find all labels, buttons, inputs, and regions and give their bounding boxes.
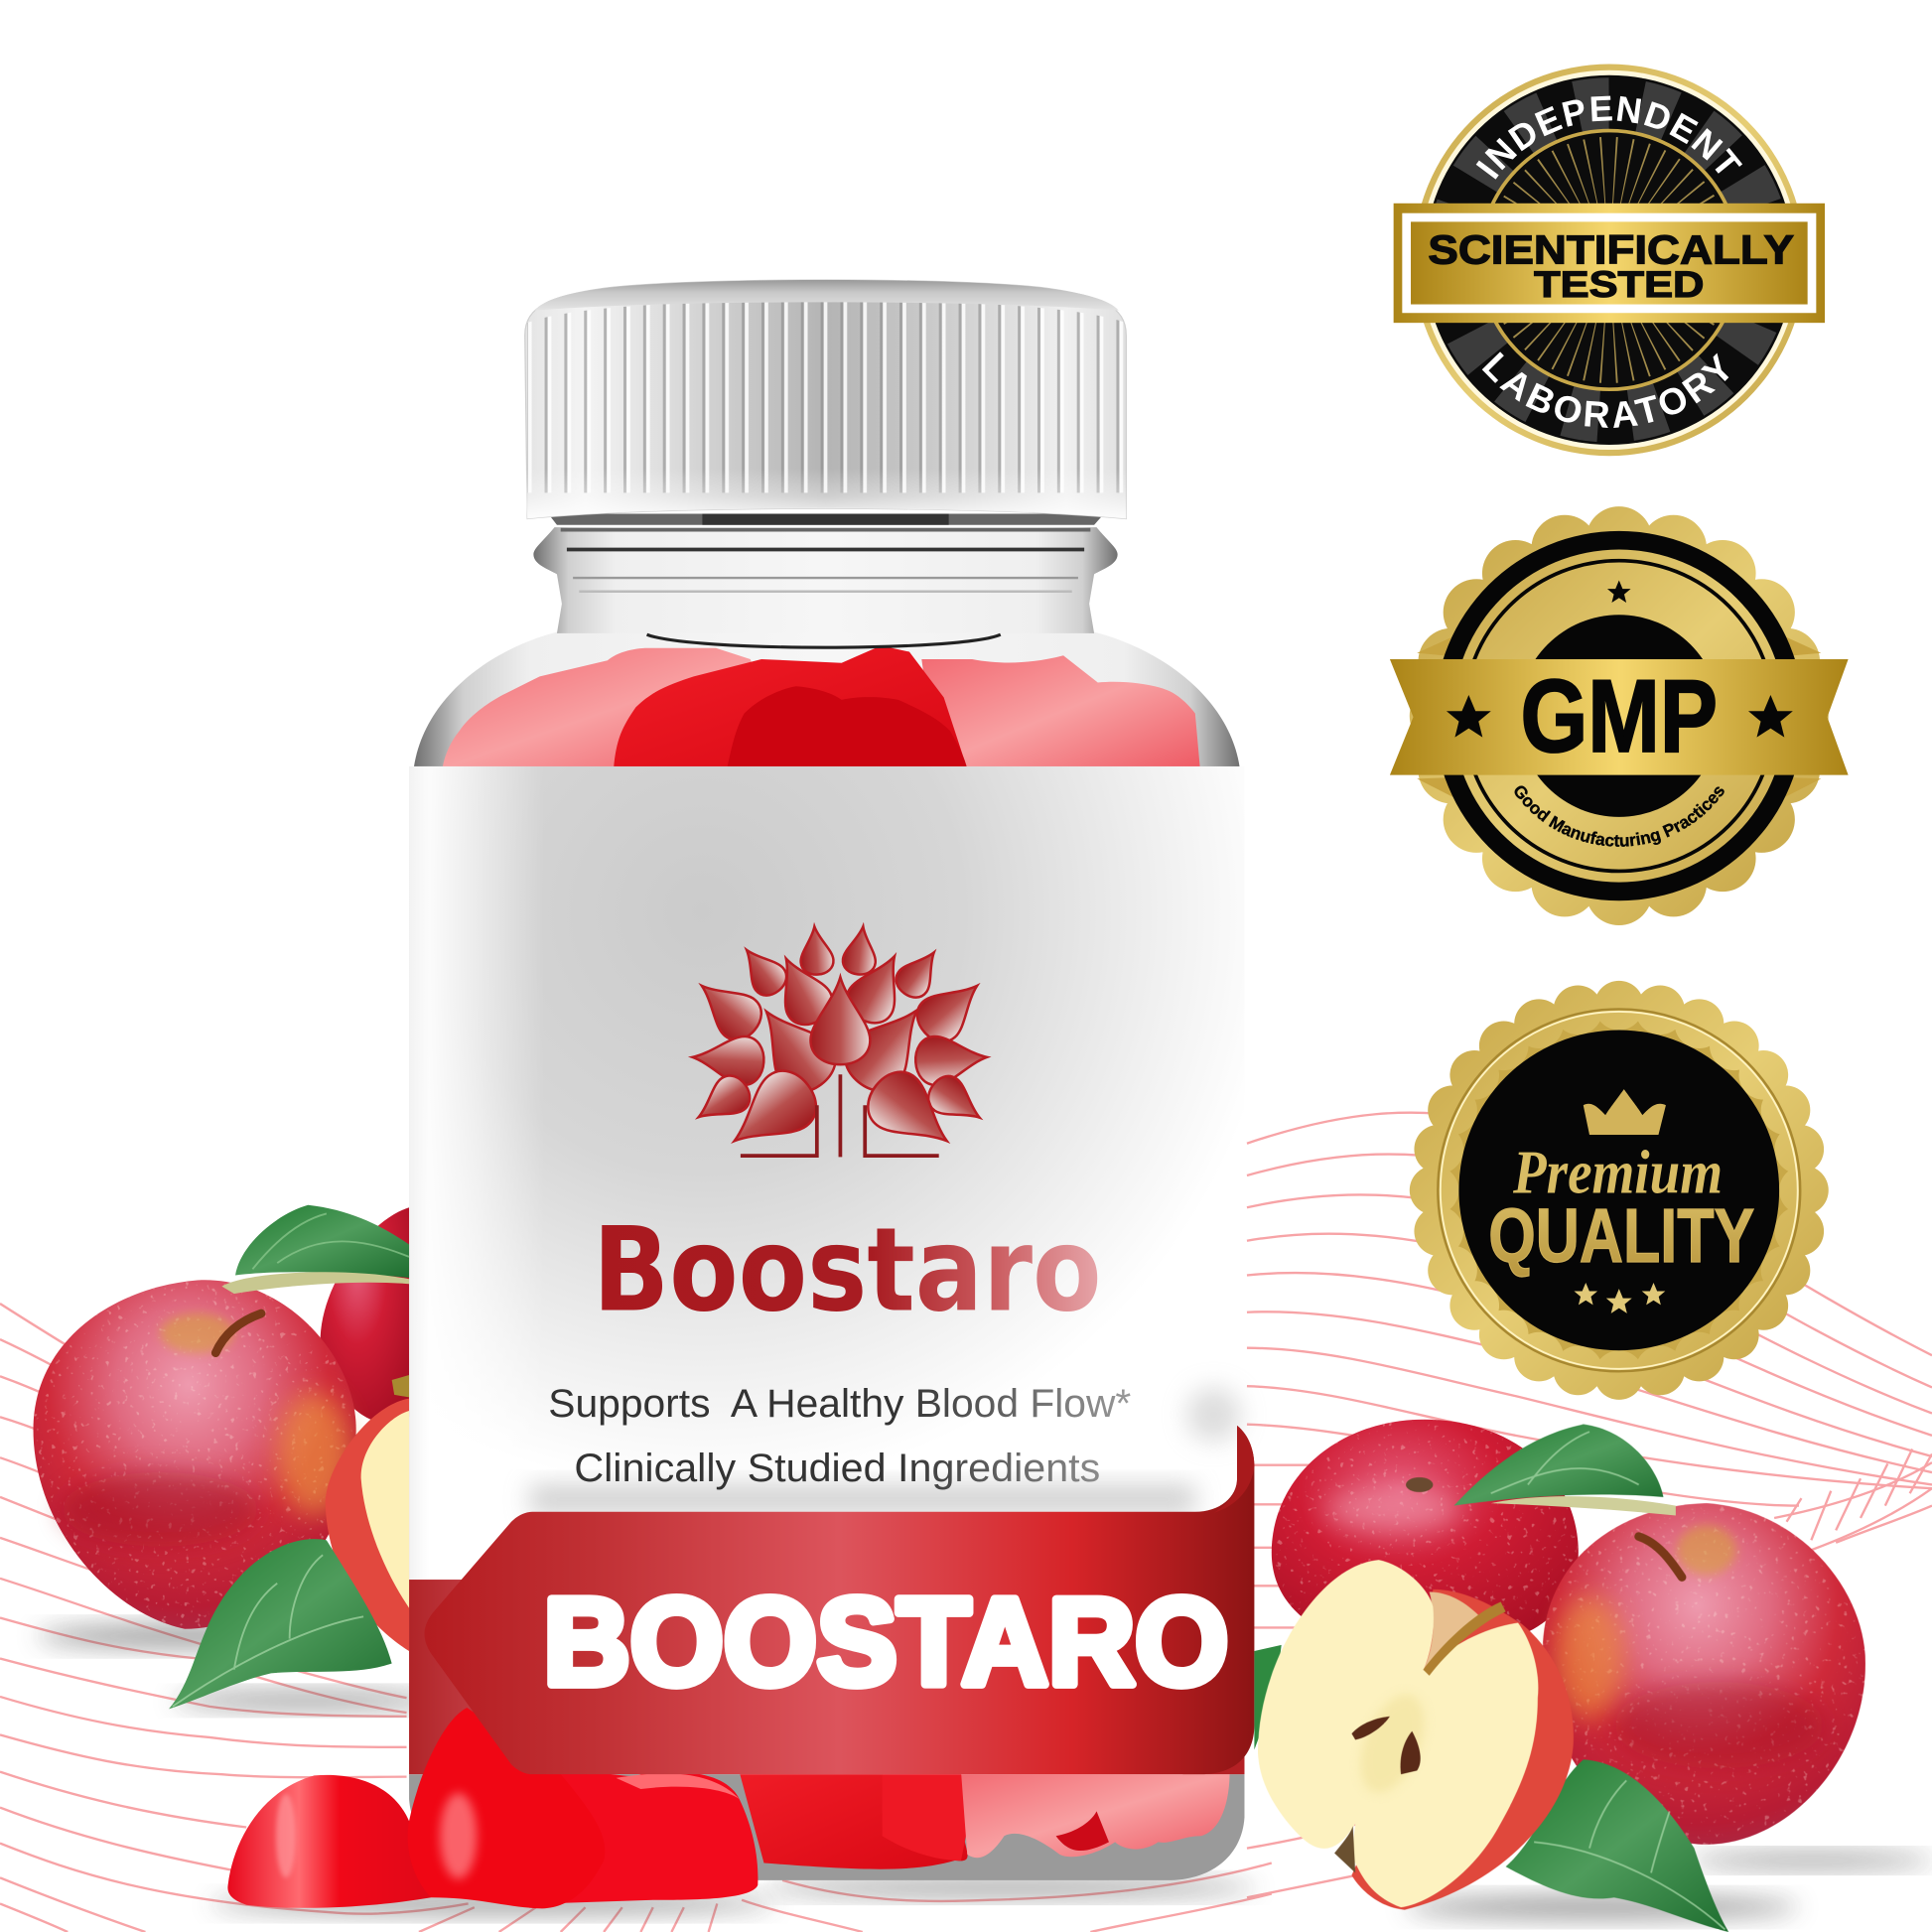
label <box>409 766 1244 1774</box>
apple flesh <box>1258 1560 1538 1907</box>
product bottle <box>409 280 1244 1880</box>
badge: scientifically tested: LABORATORY <box>1481 351 1729 428</box>
right group: back apple <box>1272 1420 1579 1651</box>
shadows under objects <box>37 1625 1932 1918</box>
label shadow above ribbon <box>530 1484 1195 1514</box>
ribbon text: BOOSTARO <box>543 1575 1228 1712</box>
tagline 1: Supports A Healthy Blood Flow* <box>548 1382 1131 1426</box>
apple seed left <box>1351 1717 1390 1739</box>
left group: main apple <box>34 1280 356 1629</box>
loose gummy right <box>542 1771 758 1903</box>
gummies inside bottle base <box>740 1772 1230 1869</box>
apple skin <box>1351 1589 1574 1910</box>
gmp ribbon <box>1390 659 1849 775</box>
right group: cut apple <box>1258 1560 1574 1910</box>
brand name: Boostaro <box>593 1202 1102 1337</box>
right group: main apple <box>1543 1503 1865 1845</box>
badge band: TESTED <box>1534 263 1704 305</box>
bottle base glass <box>409 1762 1244 1880</box>
badge band: SCIENTIFICALLY <box>1428 227 1794 273</box>
right group: bottom leaf <box>1506 1759 1728 1932</box>
neck ridges <box>548 514 1104 647</box>
badge: scientifically tested <box>1394 64 1825 457</box>
left group: cut apple <box>326 1375 409 1651</box>
arc text top <box>1470 121 1748 260</box>
gummies inside bottle top <box>443 645 1200 768</box>
gmp arc text <box>1489 717 1748 847</box>
badge band <box>1394 204 1825 323</box>
badge: GMP <box>1390 506 1849 925</box>
premium script: Premium <box>1512 1139 1723 1206</box>
logo: tree of leaves <box>687 924 993 1167</box>
left group: back apple <box>321 1207 409 1423</box>
apple seed right <box>1401 1731 1421 1774</box>
gmp ribbon stars <box>1447 695 1793 738</box>
badge: premium quality <box>1435 1006 1804 1375</box>
tagline 2: Clinically Studied Ingredients <box>574 1447 1100 1490</box>
three stars <box>1574 1283 1665 1313</box>
right group: top leaf <box>1453 1425 1676 1516</box>
decorative wave lines: right <box>782 1113 1932 1932</box>
ribbon banner <box>425 1426 1254 1774</box>
bottle cap <box>525 280 1126 518</box>
left group: top leaf <box>221 1205 409 1294</box>
apple stem <box>1423 1601 1506 1676</box>
bottle neck <box>533 527 1118 633</box>
apple core shading <box>1348 1686 1437 1802</box>
quality text: QUALITY <box>1488 1193 1754 1279</box>
loose gummy center <box>276 1708 605 1908</box>
badge: GMP: Good Manufacturing Practices <box>1515 785 1725 847</box>
loose gummy left <box>227 1775 431 1908</box>
bottle shoulder glass <box>414 630 1240 766</box>
badge: scientifically tested: INDEPENDENT <box>1475 95 1742 180</box>
left group: lower leaf <box>169 1539 392 1709</box>
red label band <box>409 1580 532 1774</box>
gmp text: GMP <box>1520 659 1718 774</box>
crown icon <box>1584 1089 1666 1135</box>
arc text bottom <box>1442 260 1777 428</box>
decorative wave lines: left <box>0 1304 863 1932</box>
gmp top star <box>1607 581 1631 603</box>
right group: leaf behind cut apple <box>1254 1645 1282 1749</box>
